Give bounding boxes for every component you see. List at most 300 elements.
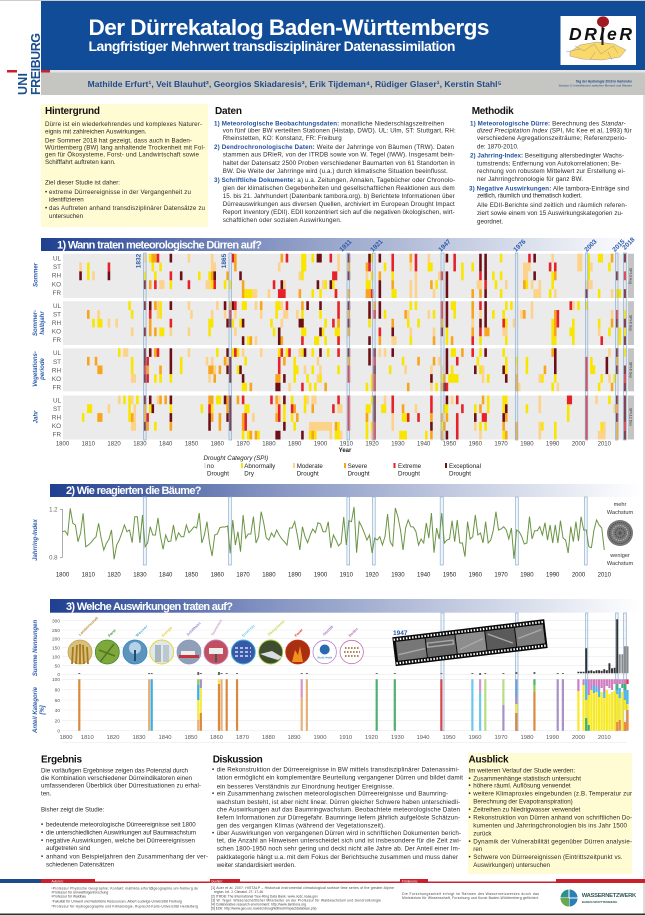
x axis years heatmap: 1970 [494,442,508,448]
icon: tourism: Tourismus [210,619,223,636]
text block: Daten 1: Rheinstetten, KO: Konstanz, FR: Freiburg [223,135,342,142]
footer: funding note [402,892,539,900]
text block: Diskussion: liefern Informationen zur Dürregefahr. Baumringe liefern jährlich aufgelöste Schätzun- [217,814,460,821]
panel: Methodik [469,106,632,226]
icon: river ecosystem: Ökosysteme [266,619,286,637]
panel: Ausblick [468,753,632,874]
text block: Ausblick: • [468,807,471,814]
station row labels: UL [53,397,61,404]
x axis years: 1870 [236,572,250,578]
text block: Hintergrund [45,121,206,220]
text block: Ausblick: Im weiteren Verlauf der Studie werden: [468,767,575,774]
event year labels [136,236,637,268]
title: Der Dürrekatalog Baden-Württembergs [88,15,490,40]
text block: Methodik 2: 2) Jahrring-Index: Beseitigung altersbedingter Wachs- [470,152,624,159]
icon: health WHO: World Health [317,656,333,660]
x axis years heatmap: 1920 [365,442,379,448]
text block: Hintergrund: gen für Ökosysteme, Forst- und Landwirtschaft sowie [45,152,200,159]
text block: Diskussion: che Auswirkungen auf das Baumringwachstum. Beobachtete meteorologische Daten [217,807,461,814]
legend: drought category: Drought [449,470,471,478]
chart: impact counts and category share [33,613,628,742]
x axis section 3: 1810 [81,735,94,741]
text block: Ausblick: Schwere von Dürreereignissen (Eintrittszeitpunkt vs. [473,854,623,861]
text block: Ausblick: • [468,791,471,798]
x axis years heatmap: 1860 [211,442,225,448]
text block: Ausblick: • [468,838,471,845]
season side labels: Sommer [34,262,40,287]
y axis labels counts: 300 [52,618,60,624]
x axis section 3: 1920 [365,735,378,741]
event year labels: 1921 [369,238,385,254]
text block: Ausblick: Zeitreihen zu Niedrigwasser verwendet [473,807,581,814]
section header 2 [50,484,641,497]
station row labels: UL [53,255,61,262]
icon: tree ring disc with growth labels [607,502,633,567]
text block: Diskussion: ein besseres Verständnis zur Einordnung heutiger Ereignisse. [217,783,394,790]
x axis years heatmap: 1900 [314,442,328,448]
text block: Hintergrund: • [45,205,47,212]
text block: Ergebnis bullets: die unterschiedlichen Auswirkungen auf Baumwachstum [46,829,196,836]
text block: Daten 1 [214,121,456,142]
x axis years: 1910 [340,572,354,578]
x axis section 3: 2010 [598,735,611,741]
text block: Hintergrund: identifizieren [49,196,84,204]
station row labels: KO [52,281,61,288]
station row labels: KO [52,376,61,383]
panel: Sommer rows [81,254,625,298]
text block: Hintergrund: eignis mit zahlreichen Auswirkungen. [45,128,147,136]
icon: wildfire: Feuer [294,628,304,638]
text block: Methodik 3: Alle EDII-Berichte sind zeitlich und räumlich referen- [477,202,627,209]
legend: drought category: Drought [207,470,229,478]
text block: Diskussion: wachstum besteht, ist aber nicht linear. Dürren gleicher Schwere haben unterschiedli- [216,799,460,806]
station row labels [52,255,61,438]
season side labels: halbjahr [40,311,46,335]
x axis section 3: 1840 [159,735,171,741]
footer: affiliations: ²Professur für Umweltfolgenforschung [51,891,108,895]
text block: Ausblick: höhere räuml. Auflösung verwendet [473,783,571,790]
x axis years heatmap: 1980 [520,442,534,448]
x axis section 3: 1890 [288,735,300,741]
x axis years heatmap: 1800 [56,442,70,448]
text block: Ergebnis bullets: aufgetreten sind [46,845,91,852]
text block: Methodik 1: 1) Meteorologische Dürre: Berechnung des Standar- [470,121,626,128]
event year labels: 1947 [437,238,453,254]
text block: Ergebnis intro: Die vorläufigen Ergebnisse zeigen das Potenzial durch [41,768,189,775]
y axis titles: [%] [40,704,46,716]
x axis years: 1850 [185,572,199,578]
legend: drought category: Drought [398,470,420,478]
text block: Ergebnis bullets: bedeutende meteorologische Dürreereignisse seit 1800 [46,822,196,829]
event year labels: 1832 [136,253,142,268]
icon: tree ring disc with growth labels: Wachstum [607,510,633,516]
y axis labels counts: 80 [55,688,60,694]
text block: Ergebnis bullets: • [41,829,43,836]
text block: Daten 1: von fünf über BW verteilten Stationen (Histalp, DWD). UL: Ulm, ST: Stuttgart, RH: [223,128,456,135]
logo: Uni Freiburg: UNI [16,73,30,95]
panel: Hintergrund: Hintergrund [45,106,100,117]
icon: agriculture: Landwirtschaft [78,616,100,637]
text block: Diskussion: über Auswirkungen von vergangenen Dürren wird in schriftlichen Dokumenten berich- [217,830,461,837]
station row labels: RH [52,272,61,280]
text block: Daten 2: BW. Die Weite der Jahrringe wird (u.a.) durch klimatische Situation beeinflusst. [223,168,448,175]
x axis years: 1940 [417,572,431,578]
text block: Diskussion: • [212,767,214,774]
text block: Daten 3: Dürreauswirkungen aus diversen Quellen, archiviert im European Drought Impact [223,201,455,208]
text block: Diskussion: schen 1800-1950 noch sehr gering und deckt nicht alle Jahre ab. Der Anteil einer Im- [217,846,460,853]
y axis: 0.8 [49,556,58,562]
text block: Ausblick: ren [473,846,483,853]
legend: drought category: Dry [244,470,255,478]
section header 3 [50,599,641,613]
station row labels: UL [53,303,61,310]
text block: Ergebnis intro [41,768,201,814]
footer: references [211,886,394,910]
y axis titles [33,619,46,734]
x axis years heatmap: 1960 [469,442,483,448]
text block: Hintergrund: Der Sommer 2018 hat gezeigt, dass auch in Baden- [45,138,192,144]
text block: Ausblick: Auswirkungen) untersuchen [473,862,551,869]
label 1947: 1947 [393,630,408,637]
logo: Wassernetzwerk [560,890,637,906]
season codes in side strip: SPI-6 Sep [629,362,633,378]
section header 1: 1) Wann traten meteorologische Dürren auf? [57,239,262,251]
text block: Ausblick: Rekonstruktion von Dürren anhand von schriftlichen Do- [473,814,632,821]
text block: Hintergrund: Schifffahrt auftreten kann. [45,159,116,166]
text block: Diskussion: die Rekonstruktion der Dürreereignisse in BW mittels transdisziplinärer Datenassimi- [217,767,459,774]
y axis labels counts: 150 [52,646,60,652]
x axis years: 1930 [391,572,405,578]
footer: references: [5] EDII: http://www.geo.uio.no/edc/droughtdb/edr/impactdatabase.php [211,906,317,910]
chart: tree ring index [33,497,633,578]
text block: Daten 3: Report Inventory (EDII). EDII konzentriert sich auf die negativen ökologischen, wirt- [223,209,455,216]
x axis years heatmap: 1990 [546,442,560,448]
legend: drought category: Exceptional [449,463,481,470]
text block: Ausblick: weitere Klimaproxies eingebunden (z.B. Temperatur zur [472,791,632,798]
text block: Diskussion: weiter standardisiert werden. [216,862,296,869]
footer: affiliations: ⁴Fakultät für Umwelt und Natürliche Ressourcen, Albert-Ludwigs-Universität Freiburg [51,899,182,903]
season side labels: Sommer- [33,310,39,336]
text block: Ergebnis bullets: schiedenen Datensätzen [46,862,115,869]
logo: Wassernetzwerk: WASSERNETZWERK [582,893,637,899]
x axis section 3: 1860 [210,735,223,741]
x axis years: 1970 [494,572,508,578]
authors: Mathilde Erfurt¹, Veit Blauhut², Georgios Skiadaresis³, Erik Tijdeman⁴, Rüdiger Glaser¹, Kerstin Stahl⁵ [88,79,502,89]
text block: Methodik 3: geordnet. [477,219,503,226]
y axis labels counts: 100 [52,654,60,660]
x axis years heatmap: 1910 [340,442,354,448]
season codes in side strip: SPI-12 Dec [629,408,633,426]
y axis labels counts: 100 [52,677,60,683]
text block: Hintergrund: Dürre ist ein wiederkehrendes und komplexes Naturer- [45,121,202,128]
legend: drought category: Extreme [398,463,422,470]
footer: affiliations: ⁵Professur für Hydrogeographie und Klimatologie, Ruprecht-Karls-Universität Heidelberg [51,904,198,908]
x axis years: 1950 [443,572,457,578]
text block: Daten 2: haltet der Datensatz 2500 Proben verschiedener Baumarten von 61 Standorten in [223,160,455,167]
text block: Diskussion: lation ermöglicht ein komplementäre Beurteilung vergangener Dürren und bildet damit [217,775,463,782]
text block: Ausblick: zurück [473,831,492,838]
footer: funding note: Die Forschungsarbeit erfolgt im Rahmen des Wassernetzwerkes durch das [402,892,539,896]
text block: Ergebnis bullets [41,822,208,869]
icon: health WHO: Gesundheit [322,624,335,637]
x axis section 3: 2000 [572,735,585,741]
x axis years: 1880 [262,572,276,578]
logo: Wassernetzwerk: BADEN-WÜRTTEMBERG [582,899,618,904]
x axis years: 1990 [546,572,560,578]
station row labels: RH [52,368,61,374]
x axis section 3: 1950 [443,735,455,741]
y axis labels counts: 0 [57,728,60,734]
text block: Methodik 2: rechnung von robustem Mittelwert zur Erstellung ei- [477,168,625,175]
x axis years: 2000 [572,572,586,578]
y axis titles: Summe Nennungen [33,619,39,676]
icon: freshwater tree: Wasser [135,624,149,638]
icon: tree ring disc with growth labels: mehr [614,502,627,508]
footer: references: [1] Auer et al. 2007: HISTALP – Historical instrumental climatological surface time series of the greater Alpine [211,886,394,890]
bar chart: category share [79,679,628,731]
text block: Daten 2: stammen aus DRieR, von der ITRDB sowie von W. Tegel (IWW). Insgesamt bein- [223,152,455,158]
x axis section 3: 1880 [262,735,275,741]
text block: Hintergrund: untersuchen [49,213,84,220]
logo: DRIeR: DRIeR [569,24,632,44]
text block: Daten 1: 1) Meteorologische Beobachtungsdaten: monatliche Niederschlagszeitreihen [214,121,445,128]
text block: Daten 2: 2) Dendrochronologische Daten: Weite der Jahrringe von Bäumen (TRW). Daten [214,144,455,151]
legend: drought category: Drought Category (SPI) [204,455,268,462]
icon: agriculture [68,616,100,664]
icon: forestry: Forst [107,628,117,638]
x axis section 3: 1990 [546,735,559,741]
x axis section 3: 1850 [185,735,197,741]
text block: Ausblick: • [468,854,471,861]
text block: Ausblick: Dynamik der Vulnerabilität gegenüber Dürren analysie- [473,838,632,845]
text block: Ausblick [468,767,632,869]
text block: Methodik 2 [470,152,625,183]
station row labels: FR [53,290,61,297]
x axis years: 1800 [56,572,70,578]
text block: Hintergrund: • [45,189,47,196]
text block: Daten 3: 15. bis 21. Jahrhundert (Datenbank tambora.org). b) Berichtete Informationen über [223,193,455,200]
text block: Ergebnis bullets: negative Auswirkungen, welche bei Dürreereignissen [46,837,196,844]
event year labels: 1976 [512,238,528,254]
x axis section 3: 1910 [339,735,352,741]
x axis section 3: 1830 [133,735,145,741]
event year labels: 2018 [621,236,637,252]
text block: Ergebnis intro: die Kombination verschiedener Dürreindikatoren einen [41,775,193,782]
legend: drought category [204,455,481,478]
station row labels: FR [53,432,61,438]
text block: Ergebnis intro: umfassenderen Überblick über Dürresituationen zu erhal- [41,783,201,790]
x axis section 3 [60,735,611,741]
x axis years [56,572,612,578]
station row labels: FR [53,337,61,344]
panel: Methodik: Methodik [472,106,514,117]
legend: drought category: no [207,463,214,470]
footer band: Quellen: [211,879,223,883]
legend: drought category: Moderate [297,463,323,470]
legend: drought category: Drought [348,470,370,478]
text block: Hintergrund: Ziel dieser Studie ist daher: [45,179,120,186]
x axis years heatmap [56,442,612,454]
footer: references: [2] ITRDB: The International Tree-Ring Data Bank. www.ncdc.noaa.gov [211,894,318,898]
text block: Diskussion: tet, die Anzahl an Hinweisen unterscheidet sich und ist insbesondere für die Zeit zwi- [217,838,461,845]
text block: Hintergrund: das Auftreten anhand transdisziplinärer Datensätze zu [49,205,206,212]
text block: Ergebnis intro: Bisher zeigt die Studie: [41,807,105,814]
header banner: Session 3: Interaktionen zwischen Mensch und Wasser [559,84,632,88]
footer band [0,879,645,883]
x axis years heatmap: 1890 [288,442,302,448]
icon: shipping: Schifffahrt [186,621,202,637]
text block: Daten 3: 3) Schriftliche Dokumente: a) u.a. Zeitungen, Annalen, Tagebücher oder Chronolo- [214,177,455,184]
icon: river ecosystem [259,619,286,664]
x axis section 3: 1930 [391,735,404,741]
season side labels: Vegetations- [33,351,39,387]
icon: shipping [177,621,202,664]
x axis section 3: 1820 [107,735,119,741]
icon: water quality [231,624,256,664]
logo: DRIeR [560,16,636,65]
season codes in side strip: SPI-3 Aug [629,268,633,284]
icon: tree ring disc with growth labels: weniger [609,553,630,559]
text block: Ergebnis bullets: • [41,822,43,829]
panel: Jahr rows [83,396,625,440]
x axis years heatmap: 1820 [107,442,121,448]
panel: Hintergrund [41,104,208,227]
text block: Ergebnis bullets: anhand von Beispieljahren den Zusammenhang der ver- [46,854,208,860]
text block: Methodik 3: zeitlich, räumlich und thematisch kodiert. [477,193,582,200]
logo: Uni Freiburg: FREIBURG [29,33,43,95]
chart: drought heatmap [33,236,637,454]
icon: freshwater tree [123,624,149,664]
legend: drought category: Drought [297,470,319,478]
text block: Daten 3: schaftlichen oder sozialen Auswirkungen. [223,217,342,224]
y axis labels counts: 40 [55,708,60,714]
panel: Sommerhalbjahr rows [88,301,625,345]
y axis labels counts: 250 [52,628,60,634]
station row labels: UL [53,350,61,357]
footer: references: [3] W. Tegel: Wissenschaftlicher Mitarbeiter an der Professur für Waldwachstum und Dendroökologie [211,898,381,902]
text block: Diskussion: gen des vergangen Klimas (während der Vegetationszeit). [217,822,385,829]
x axis years heatmap: 1950 [443,442,457,448]
y axis labels counts: 0 [57,672,60,678]
x axis section 3: 1800 [60,735,72,741]
text block: Ausblick: • [468,783,471,790]
y axis labels counts: 20 [55,718,60,724]
season codes in side strip [629,268,633,426]
x axis years heatmap: Year [339,448,352,454]
x axis years: 1820 [107,572,121,578]
footer band: Förderung: [402,879,418,883]
event year labels: 1911 [338,238,354,253]
panel: Ausblick: Ausblick [468,755,509,766]
y axis labels counts: 50 [55,664,60,670]
icon: water quality: Qualität [241,624,256,638]
icon: forestry [95,628,119,664]
panel: Daten: Daten [215,106,242,117]
text block: Diskussion: paktkategorie hängt u.a. mit dem Fokus der Berichtsuche zusammen und muss daher [217,854,458,861]
y axis labels counts: 200 [52,636,60,642]
footer: affiliations [51,886,198,908]
x axis years heatmap: 2010 [598,442,612,448]
season side labels: Jahr [34,410,40,423]
header banner [0,0,645,95]
x axis years: 1900 [314,572,328,578]
legend: drought category: Abnormally [244,463,276,470]
x axis years: 1840 [159,572,173,578]
footer: affiliations: ¹Professur Physische Geographie; Kontakt: mathilde.erfurt@geographie.uni-freiburg.de [51,886,198,890]
event year markers [144,253,626,440]
text block: Diskussion: ein Zusammenhang zwischen meteorologischen Dürreereignisse und Baumring- [217,791,448,798]
icon: cooling towers: Energie [161,626,173,638]
icon: wildfire [286,628,310,664]
season side labels [33,262,46,423]
x axis years heatmap: 1930 [391,442,405,448]
x axis years heatmap: 1810 [82,442,96,448]
footer: references: region. Int. J. Climatol. 27: 17-46 [214,890,263,894]
panel: Diskussion [212,755,463,869]
panel: Ergebnis [41,755,208,869]
y axis labels counts [52,618,60,734]
text block: Hintergrund: extreme Dürreereignisse in der Vergangenheit zu [49,189,192,196]
text block: Daten 2 [214,144,455,175]
panel: Ergebnis: Ergebnis [41,755,82,766]
y axis labels counts: 60 [55,698,60,704]
panel: Daten [214,106,456,224]
icons: impact categories [68,616,363,664]
text block: Diskussion: • [212,791,214,798]
season side labels: periode [40,358,46,381]
text block: Methodik 2: ner Jahrringchronologie für ganz BW. [477,176,583,183]
event year labels: 2003 [583,238,599,254]
x axis section 3: 1960 [469,735,481,741]
x axis section 3: 1870 [236,735,249,741]
footer: references: [4] Collaborative research environment: http://www.tambora.org [211,902,306,906]
text block: Ausblick: Zusammenhänge statistisch untersucht [473,775,581,782]
x axis years heatmap: 1850 [185,442,199,448]
text block: Methodik 1: verschiedene Agregationszeiträume; Referenzperio- [477,135,627,142]
subtitle: Langfristiger Mehrwert transdisziplinärer Datenassimilation [88,38,455,54]
y axis [33,508,62,562]
icon: tree ring disc with growth labels: Wachstum [607,561,633,567]
footer: funding note: Ministerium für Wissenschaft, Forschung und Kunst Baden-Württemberg gefördert. [402,896,539,900]
text block: Methodik 3 [469,185,630,226]
text block: Methodik 2: tumstrends; Entfernung von Autokorrelationen; Be- [477,160,621,167]
station row labels: KO [52,328,61,336]
station row labels: FR [53,384,61,392]
y axis: Jahrring-Index [33,519,39,561]
x axis section 3: 1970 [495,735,507,741]
station row labels: RH [52,320,61,327]
icon: health WHO [313,624,336,664]
y axis titles: Anteil Kategorie [33,686,39,734]
x axis years: 1980 [520,572,534,578]
x axis years: 1890 [288,572,302,578]
text block: Ausblick: kumenten und Jahrringchronologien bis ins Jahr 1500 [473,822,628,829]
footer band: Autoren: [52,879,64,883]
text block: Ausblick: • [468,775,471,782]
text block: Diskussion: • [212,830,214,837]
conference note: Tag der Hydrologie 2019 in Karlsruhe [576,80,632,84]
text block: Ergebnis intro: ten. [41,791,52,798]
text block: Methodik 3: 3) Negative Auswirkungen: Alle tambora-Einträge sind [469,185,630,192]
text block: Daten 3: gien der klimatischen Gegebenheiten und gesellschaftlichen Reaktionen aus dem [223,185,455,192]
text block: Diskussion [212,767,463,869]
bar chart: counts [79,619,628,675]
section header 3: 3) Welche Auswirkungen traten auf? [66,601,233,613]
text block: Ausblick: • [468,814,471,821]
panel: Vegetationsperiode rows [88,348,625,391]
event year labels: 1865 [221,253,228,268]
film strip photos 1947 [392,619,548,666]
